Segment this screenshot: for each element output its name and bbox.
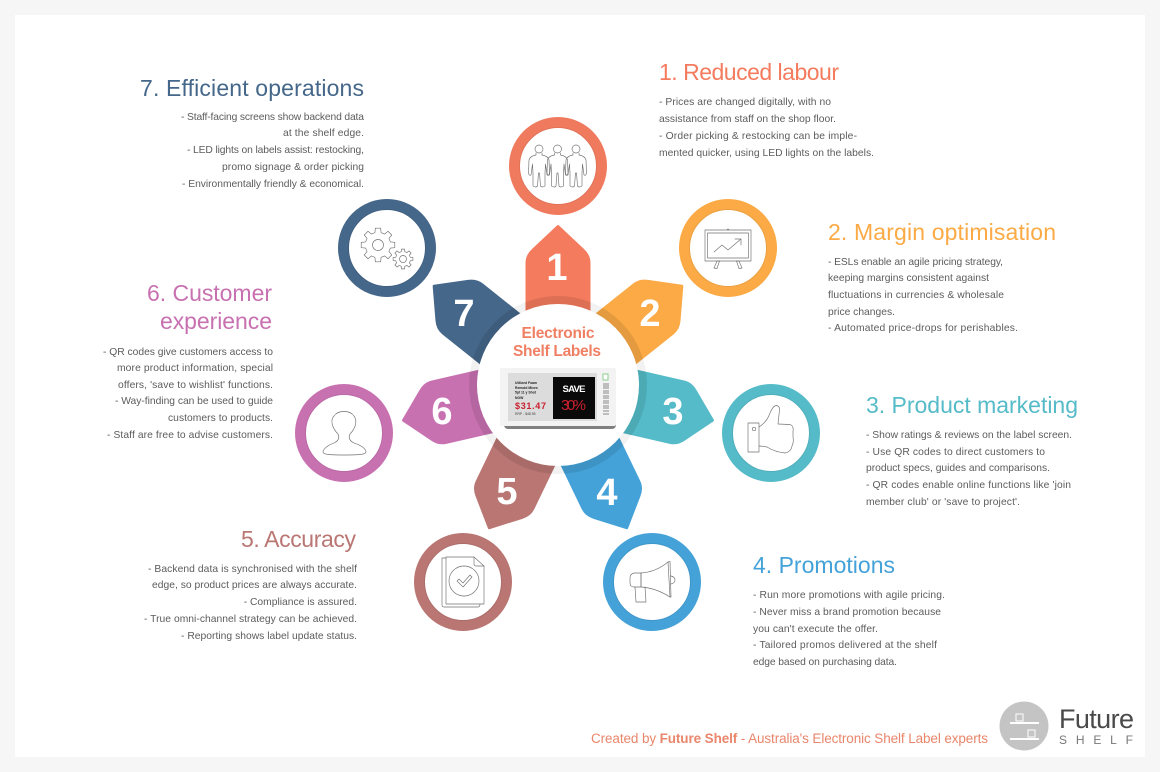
body 1: - Prices are changed digitally, with no bbox=[659, 97, 831, 108]
body 6 bbox=[103, 347, 273, 441]
logo badge bbox=[1000, 702, 1048, 750]
body 3: member club' or 'save to project'. bbox=[866, 497, 1020, 508]
body 7: promo signage & order picking bbox=[222, 162, 364, 173]
electronic shelf label device: Utilized Foam bbox=[515, 381, 537, 385]
petal number 3: 3 bbox=[662, 391, 684, 433]
electronic shelf label device: 5pt 11 y Shot bbox=[515, 390, 537, 394]
body 4: - Never miss a brand promotion because bbox=[753, 607, 941, 618]
petal 7 bbox=[413, 260, 531, 373]
body 7: at the shelf edge. bbox=[283, 128, 364, 139]
body 6: offers, 'save to wishlist' functions. bbox=[118, 380, 273, 391]
icon ring 6: customer bbox=[300, 390, 388, 476]
body 3: - Use QR codes to direct customers to bbox=[866, 447, 1045, 458]
electronic shelf label device: Remold Mixes bbox=[515, 386, 538, 390]
logo wordmark: Future bbox=[1059, 704, 1134, 734]
body 3: - Show ratings & reviews on the label screen. bbox=[866, 430, 1072, 441]
icon: thumbs up bbox=[748, 406, 793, 453]
electronic shelf label device: 30% bbox=[561, 397, 586, 414]
body 7: - LED lights on labels assist: restocking, bbox=[187, 145, 364, 156]
electronic shelf label device: SAVE bbox=[562, 384, 586, 395]
body 4: edge based on purchasing data. bbox=[753, 657, 897, 668]
petal number 6: 6 bbox=[431, 391, 453, 433]
petal number 5: 5 bbox=[496, 471, 518, 513]
logo bbox=[1000, 702, 1134, 750]
body 6: - QR codes give customers access to bbox=[103, 347, 273, 358]
petal 4 bbox=[555, 425, 657, 543]
heading 6 bbox=[147, 280, 272, 334]
icon: presentation board bbox=[705, 229, 751, 268]
body 5: edge, so product prices are always accurate. bbox=[152, 580, 357, 591]
petal number 2: 2 bbox=[639, 293, 661, 335]
body 2: fluctuations in currencies & wholesale bbox=[828, 290, 1004, 301]
body 7 bbox=[181, 112, 364, 190]
body 1: mented quicker, using LED lights on the labels. bbox=[659, 148, 874, 159]
body 2: - ESLs enable an agile pricing strategy, bbox=[828, 257, 1003, 268]
petal number 7: 7 bbox=[453, 293, 475, 335]
heading 2: 2. Margin optimisation bbox=[828, 219, 1056, 245]
petal 3 bbox=[609, 367, 721, 452]
icon: three people bbox=[528, 145, 586, 187]
body 3 bbox=[866, 430, 1072, 508]
body 4: - Tailored promos delivered at the shelf bbox=[753, 640, 937, 651]
petal number 1: 1 bbox=[546, 247, 568, 289]
body 7: - Environmentally friendly & economical. bbox=[182, 179, 364, 190]
icon ring 5: accuracy bbox=[420, 538, 506, 626]
icon: megaphone bbox=[630, 562, 675, 602]
body 4: - Run more promotions with agile pricing. bbox=[753, 590, 945, 601]
body 6: customers to products. bbox=[168, 413, 273, 424]
heading 1: 1. Reduced labour bbox=[659, 59, 839, 85]
heading 6: experience bbox=[160, 308, 272, 334]
logo: SHELF bbox=[1059, 733, 1133, 747]
icon ring 3: marketing bbox=[728, 390, 814, 476]
heading 4: 4. Promotions bbox=[753, 552, 895, 578]
icon ring 7: operations bbox=[344, 204, 430, 292]
hub title: Shelf Labels bbox=[513, 343, 601, 360]
text block 7: efficient operations bbox=[140, 75, 364, 190]
text block 4: promotions bbox=[753, 552, 945, 668]
body 5 bbox=[144, 564, 357, 642]
body 2: price changes. bbox=[828, 307, 895, 318]
centre hub bbox=[469, 296, 647, 474]
body 5: - True omni-channel strategy can be achieved. bbox=[144, 614, 357, 625]
body 3: - QR codes enable online functions like 'join bbox=[866, 480, 1071, 491]
body 7: - Staff-facing screens show backend data bbox=[181, 112, 364, 123]
hub title bbox=[513, 325, 601, 360]
body 4: you can't execute the offer. bbox=[753, 624, 878, 635]
icon ring 1: staff bbox=[514, 122, 602, 210]
body 1: assistance from staff on the shop floor. bbox=[659, 114, 836, 125]
heading 6: 6. Customer bbox=[147, 280, 272, 306]
footer credit: Created by Future Shelf - Australia's Electronic Shelf Label experts bbox=[591, 731, 988, 746]
petal 5 bbox=[459, 425, 561, 543]
petal 2 bbox=[585, 260, 703, 373]
body 2 bbox=[828, 257, 1018, 334]
icon ring 2: margin bbox=[684, 204, 772, 292]
icon: gears bbox=[361, 228, 413, 269]
body 6: - Way-finding can be used to guide bbox=[115, 396, 273, 407]
body 6: more product information, special bbox=[117, 363, 273, 374]
electronic shelf label device: $31.47 bbox=[515, 401, 546, 411]
body 1: - Order picking & restocking can be imple- bbox=[659, 131, 857, 142]
body 6: - Staff are free to advise customers. bbox=[107, 430, 273, 441]
text block 5: accuracy bbox=[144, 526, 357, 642]
petal 1 bbox=[526, 225, 590, 325]
body 1 bbox=[659, 97, 874, 159]
icon: checked document bbox=[442, 557, 484, 607]
text block 1: reduced labour bbox=[659, 59, 874, 159]
body 2: - Automated price-drops for perishables. bbox=[828, 323, 1018, 334]
body 4 bbox=[753, 590, 945, 668]
body 5: - Compliance is assured. bbox=[244, 597, 357, 608]
electronic shelf label device: NOW bbox=[515, 396, 524, 400]
hub title: Electronic bbox=[522, 325, 595, 342]
heading 5: 5. Accuracy bbox=[241, 526, 356, 552]
petal 6 bbox=[395, 367, 507, 452]
body 5: - Backend data is synchronised with the shelf bbox=[148, 564, 357, 575]
icon: person bbox=[323, 412, 366, 455]
body 5: - Reporting shows label update status. bbox=[181, 631, 357, 642]
text block 2: margin optimisation bbox=[828, 219, 1056, 334]
body 3: product specs, guides and comparisons. bbox=[866, 463, 1050, 474]
heading 7: 7. Efficient operations bbox=[140, 75, 364, 101]
petal number 4: 4 bbox=[596, 472, 618, 514]
electronic shelf label device bbox=[500, 368, 616, 429]
body 2: keeping margins consistent against bbox=[828, 273, 989, 284]
electronic shelf label device: RRP - $48.95 bbox=[515, 412, 536, 416]
text block 3: product marketing bbox=[866, 392, 1078, 508]
text block 6: customer experience bbox=[103, 280, 273, 441]
icon ring 4: promotions bbox=[608, 538, 696, 626]
heading 3: 3. Product marketing bbox=[866, 392, 1078, 418]
